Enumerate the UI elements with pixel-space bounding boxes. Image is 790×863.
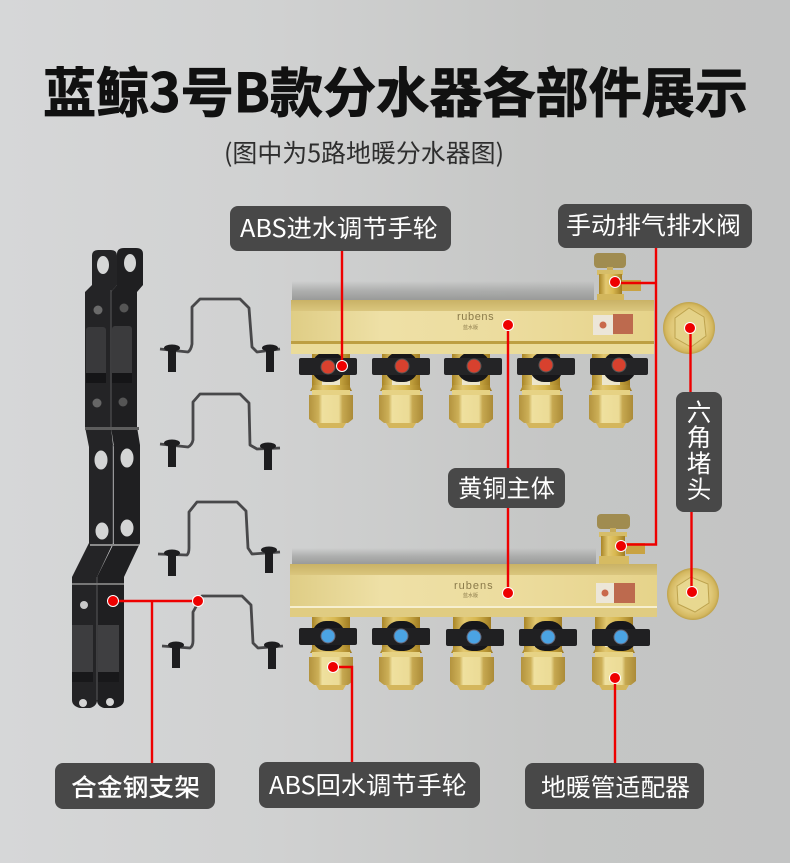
shadow <box>292 281 594 301</box>
leader lines and dots <box>108 247 698 764</box>
hex plug <box>667 568 719 620</box>
label: hex plug: 六 <box>687 394 711 429</box>
label: ABS return handwheel <box>259 762 480 808</box>
hex plug <box>663 302 715 354</box>
logo: rubens <box>457 311 494 323</box>
label: hex plug: 堵 <box>687 445 711 480</box>
label: alloy steel bracket: 合金钢支架 <box>71 769 200 804</box>
pipe clip 4 <box>162 596 283 669</box>
upper manifold assembly <box>291 253 715 428</box>
brass body: 蓝水版 <box>463 592 478 599</box>
brass body <box>291 300 654 354</box>
alloy steel wall brackets <box>72 248 143 708</box>
label: hex plug <box>676 392 722 512</box>
label: floor heating pipe adapter: 地暖管适配器 <box>541 769 690 804</box>
subtitle: (图中为5路地暖分水器图) <box>224 134 504 170</box>
label: ABS return handwheel: ABS回水调节手轮 <box>269 767 467 802</box>
label: brass body: 黄铜主体 <box>458 470 555 505</box>
valves with red caps <box>299 345 648 428</box>
shadow <box>292 548 596 565</box>
label: hex plug: 头 <box>687 471 711 506</box>
pipe clip 3 <box>158 502 280 576</box>
label: alloy steel bracket <box>55 763 215 809</box>
label: ABS inlet handwheel <box>230 206 451 251</box>
logo: rubens <box>454 580 494 592</box>
title: 蓝鲸3号B款分水器各部件展示 <box>43 51 748 128</box>
label: ABS inlet handwheel: ABS进水调节手轮 <box>240 210 438 245</box>
label: floor heating pipe adapter <box>525 763 704 809</box>
air vent valve <box>594 253 641 301</box>
brass body: 蓝水版 <box>463 324 478 331</box>
sticker <box>596 583 614 603</box>
pipe clip 1 <box>160 299 280 372</box>
lower manifold assembly <box>290 514 719 690</box>
label: manual vent and drain valve: 手动排气排水阀 <box>566 207 741 242</box>
brass body <box>290 564 657 617</box>
label: hex plug: 角 <box>687 419 711 454</box>
valves with blue caps <box>299 607 650 690</box>
sticker <box>593 315 613 335</box>
air vent valve <box>597 514 645 564</box>
pipe clip 2 <box>160 394 280 470</box>
